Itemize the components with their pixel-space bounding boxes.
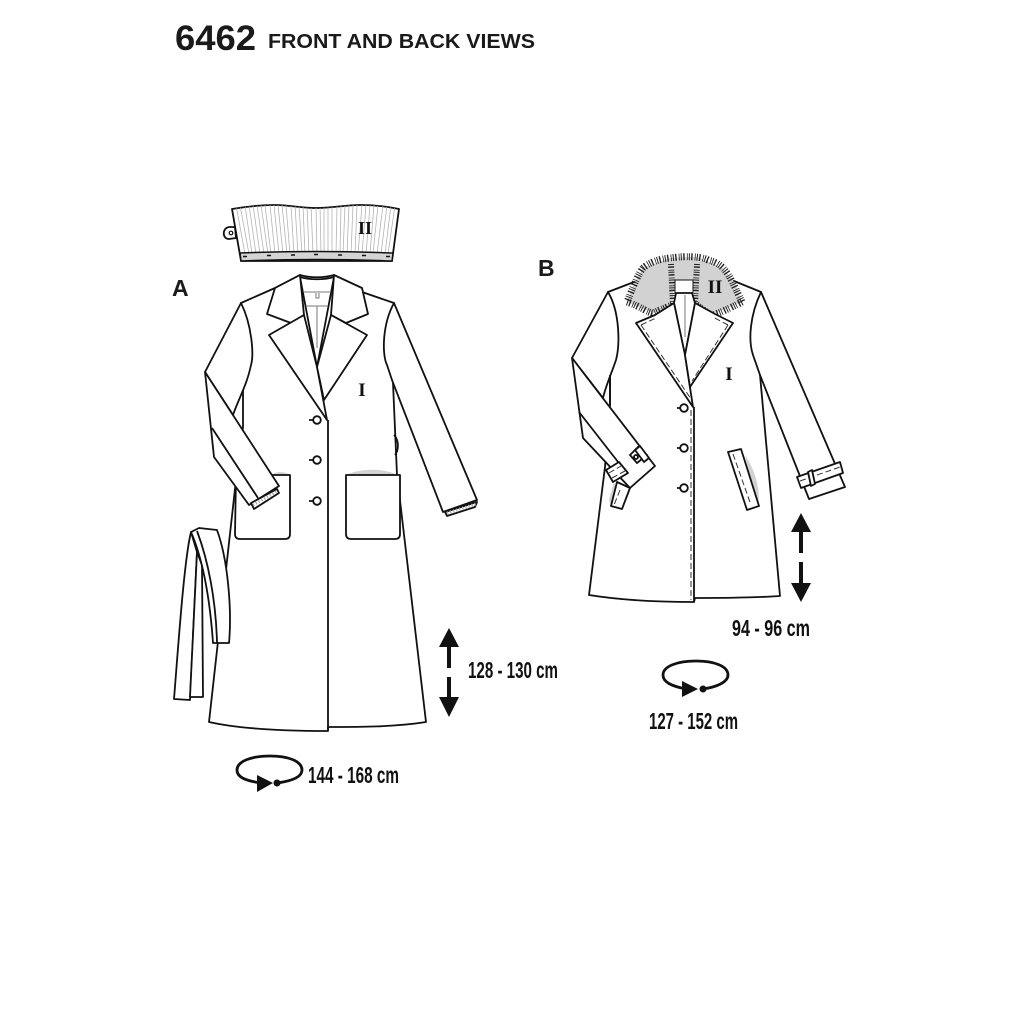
pocket shading bbox=[272, 470, 397, 475]
band tab bbox=[224, 227, 236, 239]
icon: hem loop A bbox=[237, 756, 302, 792]
buttons bbox=[677, 404, 688, 492]
arrow: length B bbox=[791, 513, 811, 602]
pockets bbox=[235, 475, 400, 539]
waist belt loop bbox=[394, 435, 398, 455]
left sleeve bbox=[205, 303, 279, 509]
right sleeve bbox=[750, 292, 845, 499]
label B: B bbox=[538, 255, 555, 281]
welt pocket right bbox=[728, 449, 759, 510]
left sleeve bbox=[572, 292, 655, 488]
belt A bbox=[174, 528, 230, 700]
collar band II for view A bbox=[224, 205, 399, 261]
fur collar bbox=[627, 257, 742, 315]
label II: II bbox=[708, 277, 722, 298]
right sleeve bbox=[384, 303, 477, 516]
text: hem width B: 127 - 152 cm bbox=[649, 708, 738, 734]
front edge bbox=[327, 420, 329, 731]
buttons bbox=[309, 416, 321, 505]
label I: I bbox=[358, 380, 366, 401]
title: 6462 bbox=[175, 19, 256, 58]
front edge bbox=[691, 407, 694, 602]
text: hem width A: 144 - 168 cm bbox=[308, 762, 399, 788]
coat A bbox=[205, 275, 477, 731]
label A: A bbox=[172, 275, 189, 301]
title: FRONT AND BACK VIEWS bbox=[268, 30, 535, 53]
band stitched strip bbox=[240, 252, 393, 261]
icon: hem loop B bbox=[663, 661, 728, 697]
welt pocket left bbox=[609, 482, 630, 509]
label II: II bbox=[358, 218, 372, 238]
lapels bbox=[636, 303, 733, 407]
text: length B: 94 - 96 cm bbox=[732, 615, 810, 641]
coat B bbox=[572, 257, 845, 602]
collar and lapels bbox=[267, 275, 368, 420]
arrow: length A bbox=[439, 628, 459, 717]
collar neck opening bbox=[674, 293, 695, 355]
title bbox=[175, 19, 535, 58]
text: length A: 128 - 130 cm bbox=[468, 657, 558, 683]
label I: I bbox=[725, 364, 733, 385]
coat A body bbox=[209, 275, 426, 731]
coat B body bbox=[589, 281, 780, 602]
